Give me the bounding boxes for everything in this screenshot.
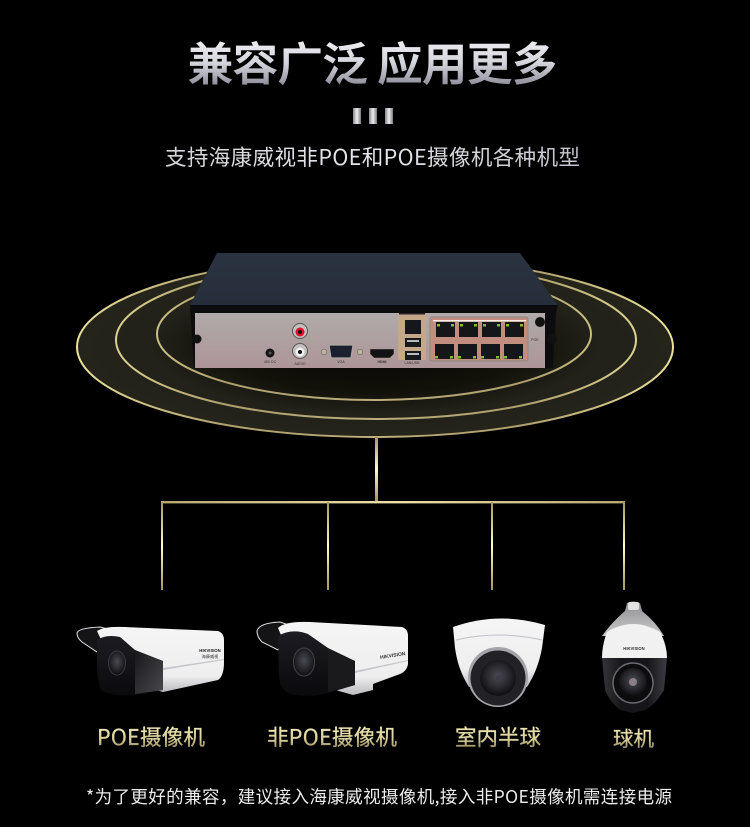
camera: indoor dome — [453, 618, 545, 707]
brand mark: HIKVISION — [199, 648, 221, 653]
visor underside — [257, 622, 292, 650]
lens — [613, 663, 653, 703]
black front — [278, 631, 355, 696]
camera: non-POE bullet — [257, 622, 408, 696]
HDMI port: HDMI — [378, 360, 386, 364]
white shell — [453, 618, 545, 687]
audio connectors: AUDIO — [294, 362, 306, 366]
title: 兼容广泛 应用更多 — [188, 28, 557, 93]
subtitle: 支持海康威视非POE和POE摄像机各种机型 — [165, 141, 580, 172]
white dome — [602, 624, 667, 658]
camera: POE bullet — [77, 627, 224, 695]
lens — [480, 660, 516, 696]
side window — [135, 651, 163, 694]
side window — [328, 649, 355, 692]
housing crease — [355, 660, 408, 673]
label: indoor dome: 室内半球 — [455, 721, 541, 752]
brand mark — [199, 648, 221, 660]
label: POE camera: POE摄像机 — [97, 721, 205, 752]
power jack: 48V DC — [264, 360, 277, 364]
NVR recorder device — [190, 253, 558, 368]
label: PTZ dome: 球机 — [613, 722, 654, 752]
silver ring — [468, 647, 528, 707]
lens — [108, 651, 126, 675]
housing crease — [163, 659, 224, 670]
black front — [97, 636, 163, 695]
LAN and USB module: LAN/USB — [405, 361, 420, 365]
audio connectors — [292, 324, 314, 366]
visor underside — [77, 627, 112, 652]
camera: PTZ speed dome — [602, 602, 667, 713]
brand mark: 海康威视 — [202, 653, 219, 660]
brand mark: HIKVISION — [380, 651, 406, 661]
white housing — [278, 622, 408, 695]
shell seam — [456, 635, 542, 640]
mount — [602, 602, 664, 636]
concentric gold rings — [77, 257, 673, 437]
device front frame — [190, 305, 558, 368]
power jack — [264, 348, 277, 364]
brand mark: HIKVISION — [623, 646, 645, 651]
gold connector lines — [161, 437, 625, 590]
black lens housing — [470, 650, 526, 706]
device rear panel — [195, 313, 545, 368]
LAN and USB module — [398, 313, 426, 365]
HDMI port — [370, 349, 394, 364]
VGA port — [321, 345, 363, 364]
black lower body — [602, 658, 667, 713]
title divider: three silver bars — [353, 108, 393, 124]
white housing — [97, 627, 224, 692]
VGA port: VGA — [337, 360, 345, 364]
footnote: *为了更好的兼容，建议接入海康威视摄像机,接入非POE摄像机需连接电源 — [86, 784, 672, 809]
lens — [294, 648, 314, 676]
power button and POE label: POE — [531, 338, 539, 342]
label: non-POE camera: 非POE摄像机 — [267, 721, 397, 752]
side screws — [192, 334, 557, 344]
device top cover — [190, 253, 558, 305]
power button and POE label — [531, 317, 545, 342]
PoE switch ports — [430, 317, 528, 361]
